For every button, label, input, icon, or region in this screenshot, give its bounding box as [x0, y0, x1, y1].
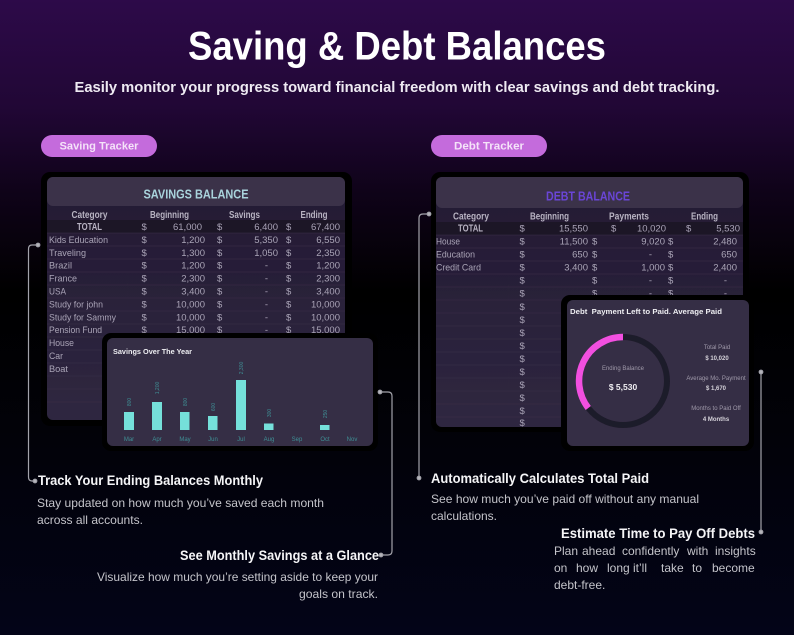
badge: saving tracker	[41, 135, 157, 157]
average payment stat: $ 1,670	[706, 386, 727, 392]
panel: debt payment donut card	[561, 295, 754, 451]
text block: time to pay off: Plan	[554, 544, 578, 558]
savings table rows: $	[217, 300, 223, 310]
bars	[124, 380, 330, 430]
savings table rows: $	[217, 312, 223, 324]
savings table rows: Boat	[49, 364, 68, 375]
savings table rows: $	[286, 235, 292, 246]
debt table rows: $	[520, 354, 526, 365]
savings table rows: -	[265, 260, 268, 272]
total paid stat: Total Paid	[704, 345, 730, 351]
text block: time to pay off: to	[692, 561, 702, 575]
text block: time to pay off: confidently	[622, 544, 679, 558]
debt table rows: TOTAL	[458, 224, 483, 234]
bar values: 300	[267, 409, 273, 417]
savings table rows: 10,000	[311, 300, 340, 310]
debt table rows: $	[520, 367, 526, 378]
text block: time to pay off: with	[686, 544, 708, 558]
savings table rows: $	[286, 222, 292, 233]
bar values	[127, 362, 329, 418]
card title: Debt Payment Left to Paid. Average Paid	[570, 307, 722, 316]
donut chart: $ 5,530	[609, 382, 637, 392]
debt table rows: $	[520, 262, 526, 274]
savings table rows: 10,000	[311, 312, 340, 324]
savings table rows: 15,000	[311, 325, 340, 336]
savings table columns: Savings	[229, 210, 260, 221]
bar values: 800	[127, 398, 133, 406]
debt table rows: $	[668, 276, 674, 286]
debt table rows: 650	[721, 250, 737, 260]
text block: time to pay off: ahead	[582, 544, 615, 558]
savings table columns: Beginning	[150, 210, 189, 221]
month labels: Mar	[124, 437, 134, 443]
debt table rows: $	[520, 250, 526, 260]
debt table rows: 2,400	[713, 262, 737, 274]
text block: monthly savings: See Monthly Savings at a Glance	[180, 548, 379, 563]
debt table rows: 3,400	[564, 262, 588, 274]
panel: savings over the year chart	[102, 333, 378, 451]
text block: track ending balances: across all accounts.	[37, 513, 143, 527]
debt table rows: $	[520, 302, 526, 313]
savings table rows: Brazil	[49, 260, 72, 272]
bar values: 600	[211, 403, 217, 411]
debt table rows: $	[592, 288, 598, 300]
debt table rows: $	[592, 250, 598, 260]
debt table rows: -	[649, 276, 652, 286]
donut chart	[579, 337, 667, 425]
connector: ending balances	[28, 243, 40, 483]
savings table rows: -	[265, 286, 268, 298]
debt table columns	[453, 212, 718, 222]
debt table rows: $	[668, 262, 674, 274]
savings table rows: $	[142, 222, 148, 233]
text block: time to pay off: Estimate Time to Pay Off Debts	[561, 526, 755, 541]
savings table rows: 15,000	[176, 325, 205, 336]
panel: savings balance table	[41, 172, 352, 426]
debt table rows: $	[668, 288, 674, 300]
months to pay off stat: 4 Months	[703, 417, 730, 423]
savings table rows: Pension Fund	[49, 325, 102, 336]
savings table rows: $	[142, 325, 148, 336]
debt table heading: DEBT BALANCE	[546, 190, 630, 204]
debt table rows: $	[520, 406, 526, 417]
savings table rows: -	[265, 325, 268, 336]
savings table rows: $	[217, 235, 223, 246]
debt table rows: 2,480	[713, 236, 737, 248]
savings table rows: $	[286, 325, 292, 336]
debt table rows: $	[668, 236, 674, 248]
debt table rows: $	[592, 262, 598, 274]
debt table rows: $	[686, 224, 692, 234]
debt table rows: $	[520, 288, 526, 300]
savings table rows: 67,400	[311, 222, 340, 233]
savings table rows: USA	[49, 286, 67, 298]
savings table rows: $	[142, 286, 148, 298]
debt table rows: $	[520, 276, 526, 286]
savings table rows: 1,300	[181, 248, 205, 259]
savings table rows: 6,550	[316, 235, 340, 246]
average payment stat: Average Mo. Payment	[686, 376, 746, 382]
text block: time to pay off: on	[554, 561, 567, 575]
savings table rows: $	[217, 325, 223, 336]
debt table rows	[436, 224, 740, 429]
savings table rows: $	[142, 248, 148, 259]
month labels: Apr	[152, 437, 162, 443]
savings table rows: $	[286, 312, 292, 324]
text block: time to pay off: debt-free.	[554, 578, 605, 592]
savings table rows: 2,300	[181, 274, 205, 284]
connector: time to pay off	[759, 370, 763, 534]
month labels: Nov	[347, 437, 357, 443]
savings table columns: Category	[72, 210, 108, 221]
text block: monthly savings	[97, 548, 379, 601]
debt table rows: $	[520, 236, 526, 248]
debt table rows: 1,000	[641, 262, 665, 274]
total paid stat	[704, 345, 730, 362]
text block: time to pay off: long	[607, 561, 630, 575]
text block: total paid: See how much you’ve paid off without any manual	[431, 492, 699, 506]
text block: total paid: calculations.	[431, 509, 497, 523]
savings table rows: TOTAL	[77, 222, 102, 233]
text block: time to pay off: how	[576, 561, 598, 575]
month labels: Jul	[237, 437, 245, 443]
month labels: Aug	[264, 437, 274, 443]
savings table rows: 2,350	[316, 248, 340, 259]
savings table rows: $	[142, 300, 148, 310]
badge: debt tracker: Debt Tracker	[454, 140, 525, 152]
debt table columns: Ending	[691, 212, 718, 222]
debt table rows: $	[520, 380, 526, 391]
panel: debt balance table	[431, 172, 749, 432]
savings table rows: $	[286, 286, 292, 298]
savings table columns	[72, 210, 328, 221]
month labels: Sep	[292, 437, 303, 443]
text block: time to pay off: insights	[715, 544, 756, 558]
text block: track ending balances: Track Your Ending Balances Monthly	[38, 473, 263, 488]
bar values: 1,200	[155, 382, 161, 394]
debt table rows: 5,530	[716, 224, 740, 234]
month labels: May	[179, 437, 191, 443]
savings table rows: $	[217, 286, 223, 298]
savings table rows: 5,350	[254, 235, 278, 246]
savings table rows: House	[49, 338, 74, 349]
savings table rows: -	[265, 312, 268, 324]
connector: monthly savings	[378, 390, 392, 557]
debt table rows: Education	[436, 250, 475, 260]
savings table rows: 1,200	[181, 235, 205, 246]
title: Saving & Debt Balances	[188, 24, 606, 68]
text block: time to pay off: become	[712, 561, 755, 575]
badge: saving tracker: Saving Tracker	[60, 140, 139, 152]
savings table rows: 61,000	[173, 222, 202, 233]
debt table rows: 10,020	[637, 224, 666, 234]
donut chart: Ending Balance	[602, 366, 645, 372]
savings table rows: France	[49, 274, 77, 284]
bar values: 250	[323, 410, 329, 418]
badge: debt tracker	[431, 135, 547, 157]
debt table rows: $	[668, 250, 674, 260]
month labels: Jun	[208, 437, 218, 443]
connector: total paid	[417, 212, 431, 480]
debt table rows: 650	[572, 250, 588, 260]
text block: track ending balances	[37, 473, 324, 527]
savings table rows: $	[217, 260, 223, 272]
debt table rows: $	[520, 341, 526, 352]
debt table columns: Category	[453, 212, 489, 222]
savings table rows: $	[142, 235, 148, 246]
debt table rows: -	[724, 288, 727, 300]
text block: track ending balances: Stay updated on how much you’ve saved each month	[37, 496, 324, 510]
savings table rows: $	[217, 248, 223, 259]
debt table rows: 9,020	[641, 236, 665, 248]
bar values: 2,300	[239, 362, 245, 374]
savings table rows: 1,050	[254, 248, 278, 259]
savings table rows: 1,200	[181, 260, 205, 272]
savings table rows: $	[142, 260, 148, 272]
debt table rows: -	[724, 276, 727, 286]
text block: total paid	[431, 471, 699, 523]
savings table rows: 10,000	[176, 300, 205, 310]
savings table rows: $	[286, 248, 292, 259]
savings table rows: Car	[49, 351, 63, 362]
savings table rows: -	[265, 300, 268, 310]
debt table rows: $	[520, 224, 526, 234]
debt table rows: $	[520, 328, 526, 339]
savings table columns: Ending	[300, 210, 328, 221]
debt table rows: $	[592, 236, 598, 248]
savings table rows: -	[265, 274, 268, 284]
savings table rows: Study for john	[49, 300, 103, 310]
debt table rows: $	[520, 393, 526, 404]
text block: time to pay off: take	[661, 561, 684, 575]
debt table rows: 11,500	[560, 236, 588, 248]
chart title: Savings Over The Year	[113, 349, 192, 356]
savings table rows: 3,400	[316, 286, 340, 298]
savings table rows: 1,200	[316, 260, 340, 272]
debt table rows: -	[649, 288, 652, 300]
text block: total paid: Automatically Calculates Total Paid	[431, 471, 649, 486]
savings table rows: $	[286, 274, 292, 284]
savings table rows: $	[142, 312, 148, 324]
debt table rows: 15,550	[559, 224, 588, 234]
text block: monthly savings: goals on track.	[299, 587, 378, 601]
savings table rows: $	[217, 222, 223, 233]
text block: monthly savings: Visualize how much you’re setting aside to keep your	[97, 570, 378, 584]
debt table rows: $	[520, 315, 526, 326]
debt table columns: Payments	[609, 212, 649, 222]
bar values: 800	[183, 398, 189, 406]
months to pay off stat: Months to Paid Off	[691, 406, 741, 412]
month labels	[124, 437, 357, 443]
average payment stat	[686, 376, 746, 392]
month labels: Oct	[320, 437, 330, 443]
debt table rows: House	[436, 236, 460, 248]
savings table heading: SAVINGS BALANCE	[144, 188, 248, 202]
savings table rows: 2,300	[316, 274, 340, 284]
text block: time to pay off	[554, 526, 756, 592]
savings table rows: $	[286, 260, 292, 272]
subtitle: Easily monitor your progress toward financial freedom with clear savings and debt tracking.	[74, 79, 720, 96]
debt table rows: $	[592, 276, 598, 286]
savings table rows: $	[217, 274, 223, 284]
debt table rows: $	[520, 418, 526, 429]
debt table rows: Credit Card	[436, 262, 481, 274]
months to pay off stat	[691, 406, 741, 423]
debt table rows: -	[649, 250, 652, 260]
savings table rows: 6,400	[254, 222, 278, 233]
savings table rows: $	[286, 300, 292, 310]
text block: time to pay off: it’ll	[633, 561, 647, 575]
savings table rows	[49, 222, 340, 375]
savings table rows: Study for Sammy	[49, 312, 116, 324]
debt table rows: $	[611, 224, 617, 234]
savings table rows: Traveling	[49, 248, 86, 259]
debt table columns: Beginning	[530, 212, 569, 222]
savings table rows: 10,000	[176, 312, 205, 324]
savings table rows: Kids Education	[49, 235, 108, 246]
total paid stat: $ 10,020	[705, 356, 729, 362]
savings table rows: 3,400	[181, 286, 205, 298]
savings table rows: $	[142, 274, 148, 284]
